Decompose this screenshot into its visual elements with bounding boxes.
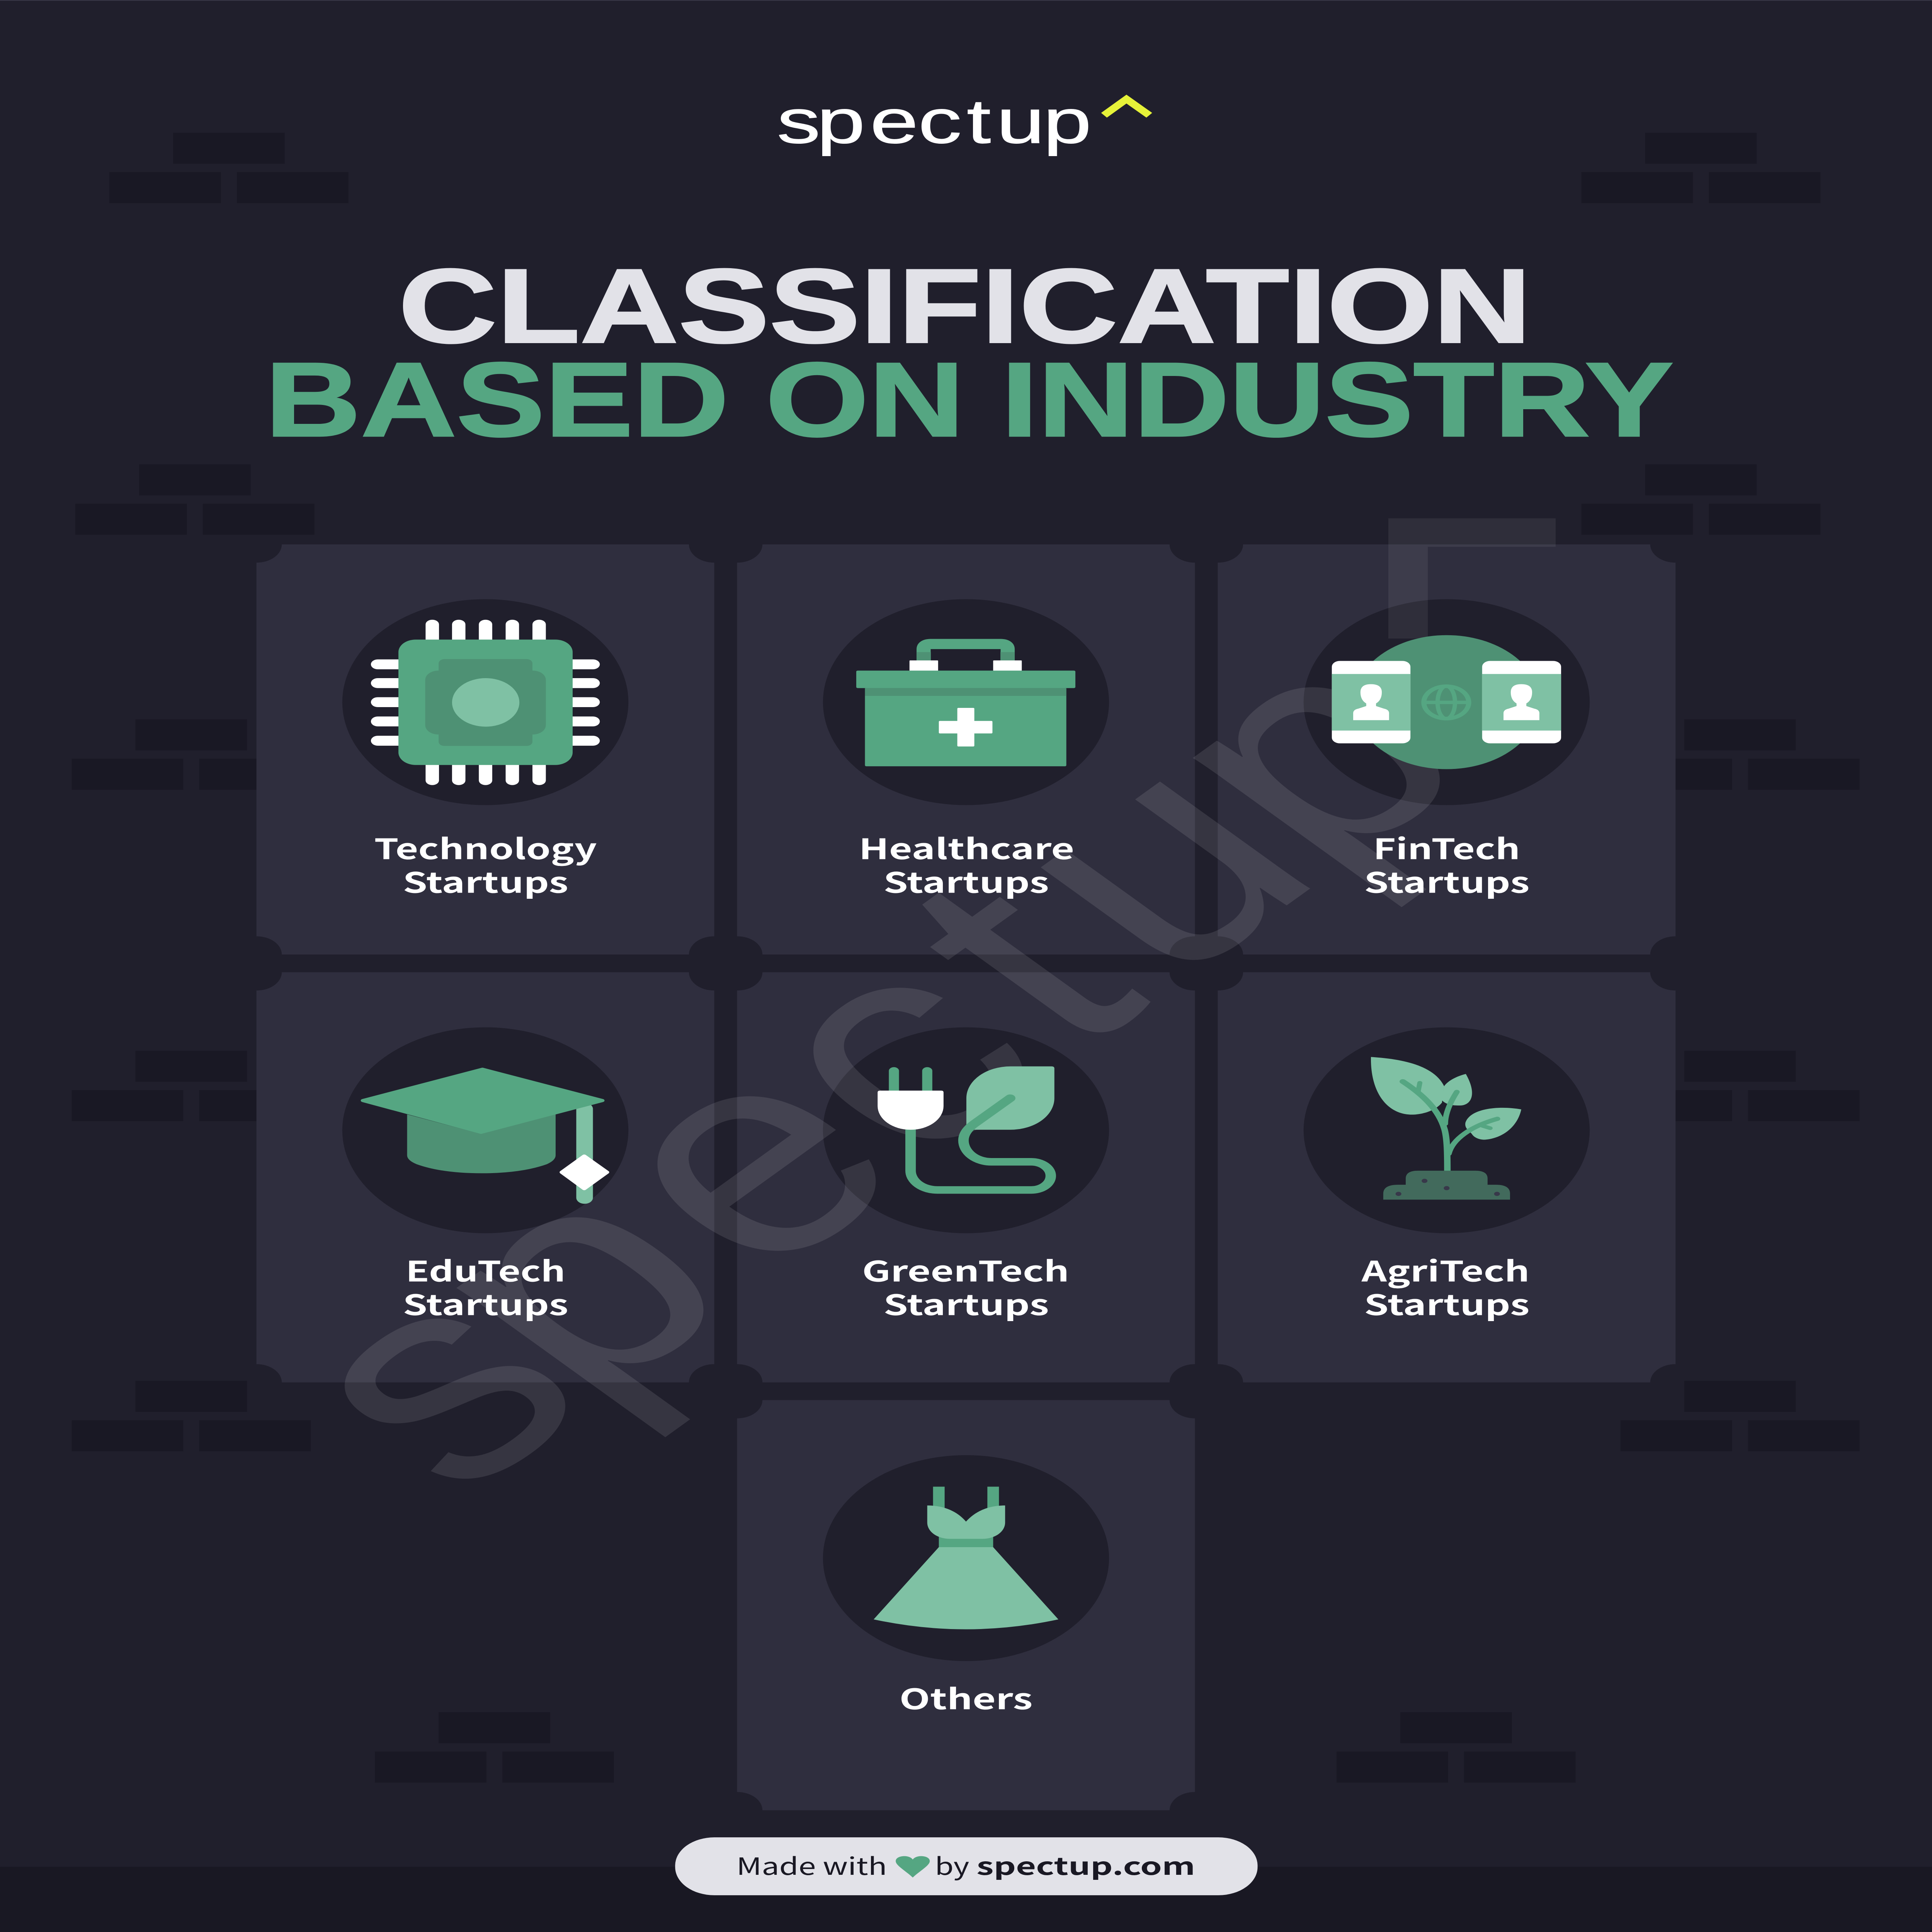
icon: plug and leaf: [878, 1066, 1054, 1190]
panel: GreenTech Startups card: [737, 972, 1195, 1383]
label: Others: Others: [900, 1677, 1032, 1718]
footer pill: Made with: [736, 1848, 887, 1882]
panel: Healthcare Startups card: [737, 544, 1195, 954]
label: GreenTech Startups: GreenTech: [862, 1249, 1069, 1290]
label: Healthcare Startups: Healthcare: [859, 827, 1074, 867]
panel: Technology Startups card: [257, 544, 714, 954]
label: AgriTech Startups: Startups: [1364, 1283, 1530, 1323]
label: EduTech Startups: [403, 1249, 568, 1323]
label: GreenTech Startups: [862, 1249, 1069, 1323]
label: GreenTech Startups: Startups: [883, 1283, 1049, 1323]
panel: Others card: [737, 1400, 1195, 1810]
icon: dress: [874, 1487, 1058, 1629]
icon: microchip: [371, 620, 600, 785]
label: AgriTech Startups: [1361, 1249, 1530, 1323]
footer pill: spectup.com: [976, 1848, 1195, 1882]
footer pill: [675, 1837, 1258, 1895]
label: EduTech Startups: Startups: [403, 1283, 568, 1323]
panel: FinTech Startups card: [1218, 544, 1675, 954]
label: FinTech Startups: Startups: [1364, 861, 1530, 901]
icon: medical kit: [856, 644, 1075, 766]
label: Healthcare Startups: Startups: [883, 861, 1049, 901]
icon: graduation cap: [363, 1069, 607, 1204]
title: [265, 247, 1673, 458]
logo: spectup: spectup: [777, 87, 1092, 156]
panel: EduTech Startups card: [257, 972, 714, 1383]
label: EduTech Startups: EduTech: [406, 1249, 565, 1290]
label: Healthcare Startups: [859, 827, 1074, 901]
icon: phones and globe: [1332, 635, 1561, 769]
label: Technology Startups: Startups: [403, 861, 568, 901]
label: FinTech Startups: [1364, 827, 1530, 901]
title: CLASSIFICATION: [398, 247, 1531, 365]
label: FinTech Startups: FinTech: [1373, 827, 1520, 867]
label: Technology Startups: Technology: [374, 827, 597, 867]
icon: heart: [896, 1856, 930, 1878]
footer pill: by: [935, 1848, 969, 1882]
icon: seedling: [1371, 1057, 1521, 1200]
watermark: spectup: spectup: [202, 582, 1543, 1546]
title: BASED ON INDUSTRY: [265, 340, 1673, 458]
panel: AgriTech Startups card: [1218, 972, 1675, 1383]
label: AgriTech Startups: AgriTech: [1361, 1249, 1530, 1290]
label: Technology Startups: [374, 827, 597, 901]
